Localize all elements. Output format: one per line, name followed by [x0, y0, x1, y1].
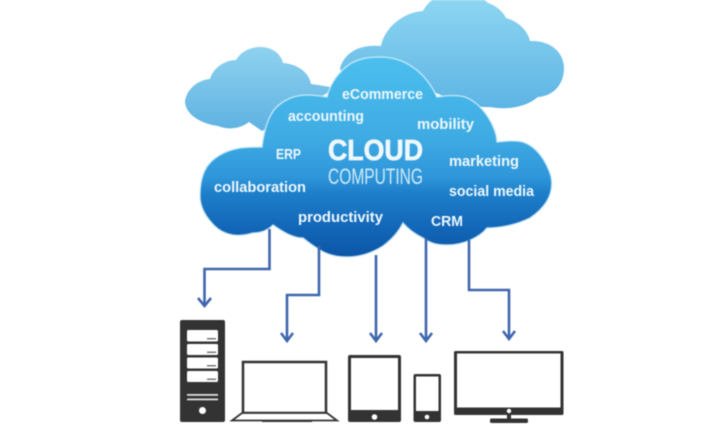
label: productivity: productivity: [298, 210, 383, 226]
arrow to server: [198, 229, 270, 306]
icon: monitor: [454, 351, 564, 423]
icon: server tower: [180, 320, 225, 422]
arrow to laptop: [281, 246, 319, 341]
back cloud: right: [340, 0, 564, 108]
heading: CLOUD: CLOUD: [328, 135, 423, 167]
main cloud: [200, 57, 552, 257]
label: collaboration: collaboration: [214, 180, 306, 196]
label: marketing: marketing: [449, 154, 519, 170]
arrow to tablet: [370, 255, 382, 341]
label: CRM: CRM: [431, 214, 463, 230]
label: eCommerce: eCommerce: [342, 87, 423, 103]
heading: COMPUTING: COMPUTING: [328, 164, 423, 189]
label: social media: social media: [449, 184, 535, 200]
icon: phone: [414, 374, 441, 422]
arrow to phone: [420, 238, 432, 341]
label: accounting: accounting: [288, 109, 364, 125]
icon: tablet: [348, 355, 401, 422]
icon: laptop: [232, 362, 337, 422]
label: mobility: mobility: [417, 117, 474, 133]
label: ERP: ERP: [276, 147, 301, 163]
arrow to monitor: [469, 240, 515, 339]
back cloud: left: [185, 47, 335, 131]
